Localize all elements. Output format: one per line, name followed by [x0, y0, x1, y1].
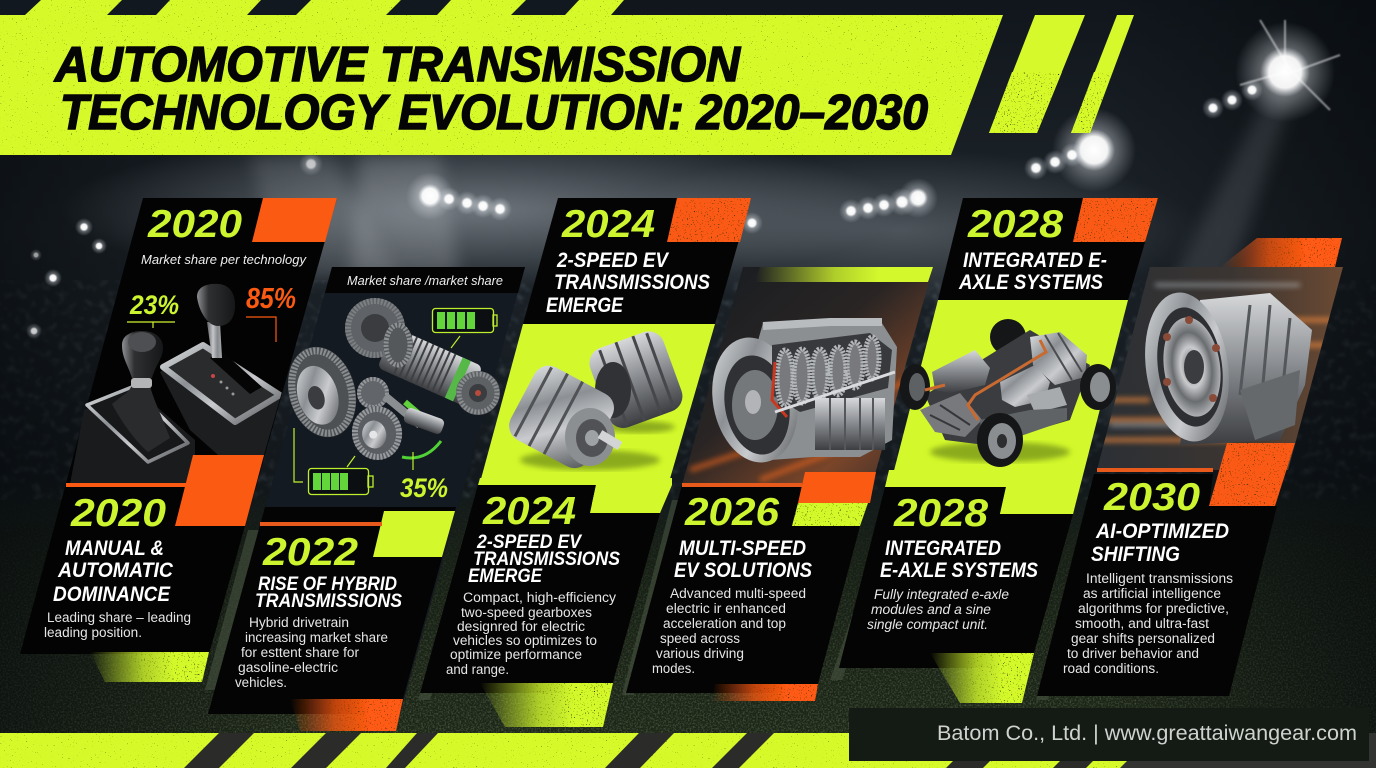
heading: [880, 537, 1038, 582]
heading: [53, 537, 174, 606]
body text: speed across: [660, 631, 740, 646]
image: AI transmission: [1136, 287, 1312, 447]
heading: [674, 537, 812, 582]
heading: SHIFTING: [1091, 543, 1180, 566]
body text: Hybrid drivetrain: [249, 615, 349, 630]
stat: automatic 85%: [246, 283, 296, 342]
heading: MANUAL &: [65, 537, 164, 560]
body text: Fully integrated e-axle: [874, 587, 1009, 602]
heading: E-AXLE SYSTEMS: [880, 559, 1038, 582]
year 2030: 2030: [1103, 476, 1200, 519]
body text: [446, 590, 616, 677]
heading top: EMERGE: [546, 294, 624, 317]
stat: 35%: 35%: [400, 473, 448, 503]
body text: Intelligent transmissions: [1086, 571, 1233, 586]
panel gap strips on the turf: [205, 500, 1100, 700]
body text: and range.: [446, 662, 509, 677]
heading: INTEGRATED: [885, 537, 1001, 560]
year 2028: 2028: [893, 492, 988, 535]
panel: 2024 two-speed EV transmissions: [420, 198, 751, 727]
body text: [235, 615, 388, 690]
body text: electric ir enhanced: [666, 601, 786, 616]
image: multi-speed transmission cutaway: [703, 320, 897, 469]
image: two-speed EV gearbox: [503, 327, 687, 474]
body text: [44, 610, 191, 640]
heading: RISE OF HYBRID: [258, 574, 397, 595]
body text: vehicles so optimizes to: [453, 633, 597, 648]
watermark box: [849, 708, 1369, 761]
image: e-axle chassis: [900, 319, 1116, 467]
body text: to driver behavior and: [1067, 646, 1199, 661]
year 2028 top: 2028: [967, 203, 1063, 246]
year 2022: 2022: [262, 531, 358, 574]
year 2020 top: 2020: [147, 203, 242, 246]
heading top: AXLE SYSTEMS: [958, 271, 1103, 294]
panel: 2030 AI-optimized shifting: [1037, 238, 1350, 696]
title: AUTOMOTIVE TRANSMISSION: [54, 38, 742, 92]
heading top: [546, 249, 710, 317]
body text: gear shifts personalized: [1071, 631, 1215, 646]
body text: road conditions.: [1063, 661, 1159, 676]
image: gear shifters: [70, 284, 282, 484]
year 2024 top: 2024: [561, 203, 655, 246]
body text: gasoline-electric: [238, 660, 338, 675]
stadium floodlights: [26, 20, 1340, 339]
heading: TRANSMISSIONS: [255, 591, 402, 612]
year 2024: 2024: [482, 490, 576, 533]
watermark box: Batom Co., Ltd. | www.greattaiwangear.com: [937, 722, 1357, 745]
heading top: 2-SPEED EV: [556, 249, 670, 272]
body text: as artificial intelligence: [1083, 586, 1221, 601]
heading: [255, 574, 402, 612]
body text: smooth, and ultra-fast: [1075, 616, 1209, 631]
body text: two-speed gearboxes: [461, 605, 592, 620]
heading: MULTI-SPEED: [679, 537, 806, 560]
heading: AI-OPTIMIZED: [1095, 520, 1229, 543]
heading: EV SOLUTIONS: [674, 559, 812, 582]
body text: modules and a sine: [871, 602, 991, 617]
body text: various driving: [656, 646, 744, 661]
icon: battery upper: [432, 308, 497, 348]
heading: 2-SPEED EV: [476, 532, 582, 553]
title: TECHNOLOGY EVOLUTION: 2020–2030: [60, 86, 928, 140]
panel: 2020 manual and automatic dominance: [20, 198, 337, 682]
year 2026: 2026: [684, 491, 779, 534]
heading: TRANSMISSIONS: [473, 549, 620, 570]
body text: Advanced multi-speed: [670, 586, 806, 601]
body text: Compact, high-efficiency: [463, 590, 616, 605]
body text: single compact unit.: [867, 617, 988, 632]
image: hybrid gear assembly: [278, 298, 500, 464]
stat: 35%: [400, 452, 448, 503]
body text: leading position.: [44, 625, 142, 640]
body text: for esttent share for: [241, 645, 360, 660]
icon: battery lower: [294, 428, 373, 494]
body text: Leading share – leading: [47, 610, 191, 625]
body text: [652, 586, 806, 676]
body text: [1063, 571, 1233, 676]
year 2020: 2020: [70, 492, 166, 535]
body text: designred for electric: [457, 619, 585, 634]
panel: 2026 multi-speed EV solutions: [626, 267, 933, 701]
stat: manual 23%: 23%: [129, 290, 179, 320]
body text: modes.: [652, 661, 695, 676]
body text: algorithms for predictive,: [1078, 601, 1229, 616]
body text: increasing market share: [245, 630, 388, 645]
header accent stripes: [989, 15, 1134, 133]
bottom hazard stripe band: [0, 733, 1376, 768]
caption: Market share per technology: [141, 253, 307, 267]
heading top: TRANSMISSIONS: [554, 271, 710, 294]
panel: 2022 rise of hybrid transmissions: [208, 267, 525, 731]
stat: automatic 85%: 85%: [246, 283, 296, 315]
heading top: [958, 249, 1107, 294]
heading: EMERGE: [468, 566, 543, 587]
heading: DOMINANCE: [53, 583, 171, 606]
header banner: [0, 0, 1003, 155]
heading: AUTOMATIC: [57, 559, 174, 582]
panel: 2028 integrated e-axle systems: [839, 198, 1158, 703]
heading top: INTEGRATED E-: [963, 249, 1107, 272]
stat: manual 23%: [127, 290, 179, 328]
body text: [867, 587, 1009, 632]
heading: [468, 532, 620, 587]
title: [54, 38, 928, 140]
body text: optimize performance: [450, 647, 582, 662]
heading: [1091, 520, 1229, 566]
body text: acceleration and top: [663, 616, 786, 631]
body text: vehicles.: [235, 675, 287, 690]
caption: Market share /market share: [347, 274, 503, 288]
